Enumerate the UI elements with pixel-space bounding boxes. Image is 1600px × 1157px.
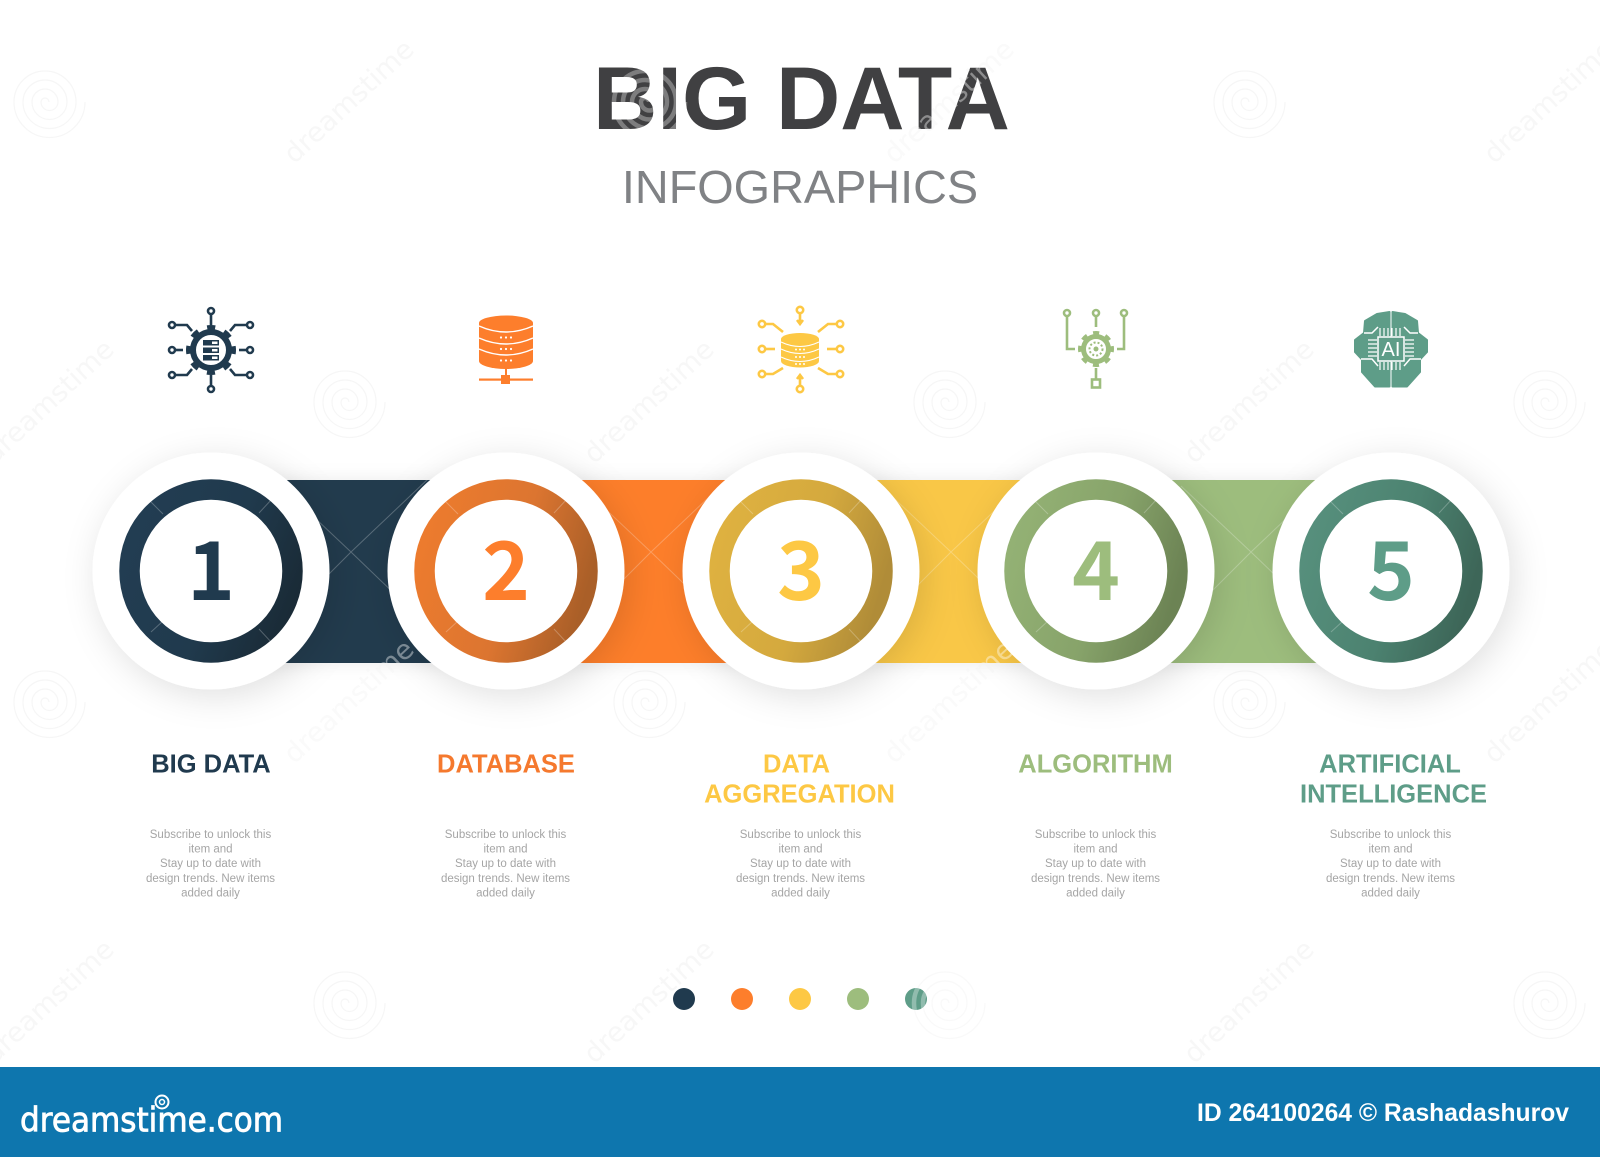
column 3 text: data aggregation: item and [778, 844, 823, 856]
column 2 text: database: Stay up to date with [455, 858, 556, 870]
icon: artificial intelligence brain [1355, 312, 1427, 386]
column 1 text: big data [146, 750, 275, 900]
infographic canvas: dreamstime [278, 634, 420, 770]
footer logo: dreamstime.com [20, 1100, 283, 1140]
column 5 text: artificial intelligence: added daily [1361, 888, 1420, 900]
column 3 text: data aggregation: Stay up to date with [750, 858, 851, 870]
step 3 circle [682, 452, 920, 690]
infographic canvas: dreamstime [278, 634, 420, 770]
column 4 text: algorithm: ALGORITHM [1018, 750, 1173, 778]
column 2 text: database: Subscribe to unlock this [445, 829, 566, 841]
column 4 text: algorithm: design trends. New items [1031, 873, 1160, 885]
step 4 circle [978, 452, 1214, 690]
column 2 text: database: added daily [476, 888, 535, 900]
step 4 circle: 4 [1072, 507, 1120, 624]
step 5 circle [1272, 452, 1510, 690]
column 1 text: big data: BIG DATA [151, 750, 271, 778]
column 5 text: artificial intelligence: ARTIFICIAL [1319, 750, 1461, 778]
icon: data aggregation [759, 307, 843, 392]
icon: algorithm gear [1064, 310, 1127, 388]
column 3 text: data aggregation: added daily [771, 888, 830, 900]
column 4 text: algorithm: added daily [1066, 888, 1125, 900]
infographic canvas: dreamstime [878, 34, 1020, 170]
infographic canvas: dreamstime [278, 34, 420, 170]
infographic canvas: dreamstime [578, 334, 720, 470]
footer credit: ID 264100264 © Rashadashurov [1197, 1099, 1569, 1127]
infographic canvas: dreamstime [1178, 934, 1320, 1070]
step 5 circle: 5 [1367, 507, 1415, 624]
column 1 text: big data: Stay up to date with [160, 858, 261, 870]
column 1 text: big data: Subscribe to unlock this [150, 829, 271, 841]
column 4 text: algorithm [1018, 750, 1173, 900]
infographic canvas: dreamstime [878, 34, 1020, 170]
icon: database server [479, 316, 533, 384]
column 5 text: artificial intelligence: Stay up to date with [1340, 858, 1441, 870]
column 2 text: database [437, 750, 575, 900]
title: BIG DATA [593, 48, 1010, 148]
icon: artificial intelligence brain: AI [1382, 339, 1400, 361]
column 3 text: data aggregation: design trends. New items [736, 873, 865, 885]
column 4 text: algorithm: item and [1073, 844, 1118, 856]
icon: big data gear network [169, 308, 253, 392]
column 5 text: artificial intelligence: INTELLIGENCE [1300, 780, 1487, 808]
column 3 text: data aggregation: Subscribe to unlock this [740, 829, 861, 841]
step 1 circle: 1 [187, 507, 235, 624]
infographic canvas: dreamstime [878, 634, 1020, 770]
step 1 circle [92, 452, 330, 690]
column 3 text: data aggregation: AGGREGATION [704, 780, 895, 808]
column 2 text: database: design trends. New items [441, 873, 570, 885]
column 3 text: data aggregation [704, 750, 895, 900]
column 5 text: artificial intelligence: Subscribe to unlock this [1330, 829, 1451, 841]
column 5 text: artificial intelligence: design trends. New items [1326, 873, 1455, 885]
column 1 text: big data: design trends. New items [146, 873, 275, 885]
pagination dots [673, 988, 927, 1010]
infographic canvas: dreamstime [1178, 334, 1320, 470]
column 5 text: artificial intelligence: item and [1368, 844, 1413, 856]
infographic canvas: dreamstime [878, 634, 1020, 770]
column 4 text: algorithm: Stay up to date with [1045, 858, 1146, 870]
step 3 circle: 3 [777, 507, 825, 624]
infographic canvas: dreamstime [578, 934, 720, 1070]
column 1 text: big data: added daily [181, 888, 240, 900]
footer bar [0, 1067, 1600, 1157]
subtitle: INFOGRAPHICS [622, 161, 978, 213]
column 2 text: database: DATABASE [437, 750, 575, 778]
column 5 text: artificial intelligence [1300, 750, 1487, 900]
band: connectors between circles [211, 480, 1391, 663]
step 2 circle: 2 [482, 507, 530, 624]
column 2 text: database: item and [483, 844, 528, 856]
column 3 text: data aggregation: DATA [763, 750, 830, 778]
column 4 text: algorithm: Subscribe to unlock this [1035, 829, 1156, 841]
column 1 text: big data: item and [188, 844, 233, 856]
step 2 circle [388, 452, 624, 690]
